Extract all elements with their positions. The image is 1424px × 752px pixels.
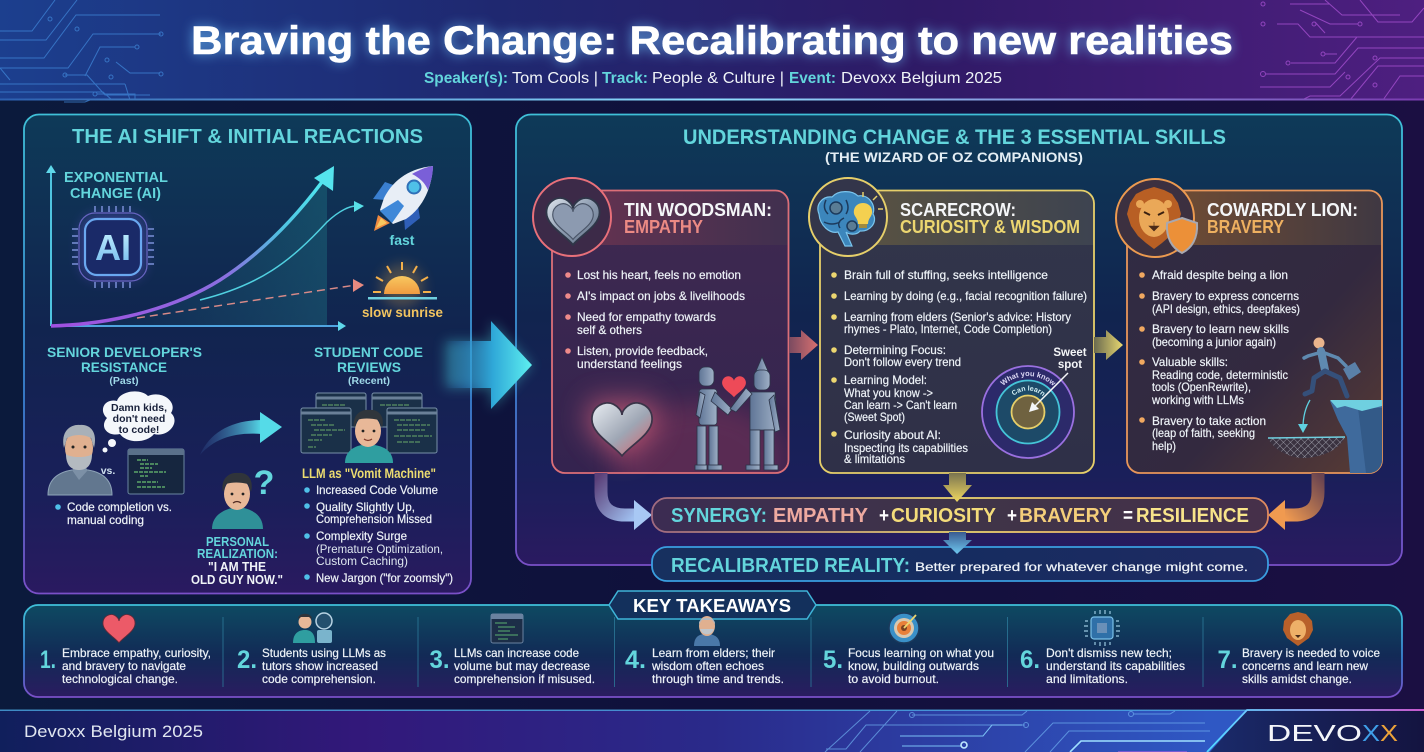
card title: SCARECROW:: [900, 200, 1016, 220]
takeaway 1: Embrace empathy, curiosity,: [62, 646, 211, 660]
bullet: code completion vs manual coding: [55, 500, 172, 527]
heading: senior developer's resistance: RESISTANCE: [81, 359, 167, 375]
student review bullets: Complexity Surge: [316, 529, 407, 543]
takeaway 3: LLMs can increase code: [454, 646, 579, 660]
logo: Devoxx: X: [1380, 720, 1398, 746]
card title: TIN WOODSMAN:: [624, 200, 772, 220]
panel heading: UNDERSTANDING CHANGE & THE 3 ESSENTIAL SKILLS: [683, 126, 1226, 149]
curiosity bullets: rhymes - Plato, Internet, Code Completion): [844, 322, 1052, 336]
label: sweet spot: spot: [1058, 359, 1082, 371]
bar: synergy equation: +: [1007, 505, 1017, 527]
label: slow sunrise: slow sunrise: [362, 304, 443, 320]
icon: robot and tin man handshake: [695, 357, 780, 470]
bar: synergy equation: [652, 498, 1268, 532]
takeaway 4: wisdom often echoes: [651, 659, 764, 673]
subtitle: speaker, track, event: Event:: [789, 70, 836, 87]
diagram: sweet spot target: Can learn: [1012, 386, 1044, 396]
logo: Devoxx: [1267, 720, 1398, 746]
icon: glowing metal heart: [588, 399, 656, 459]
badge: key takeaways: KEY TAKEAWAYS: [633, 596, 791, 616]
takeaway 4: [625, 616, 784, 686]
takeaway 2: Students using LLMs as: [262, 646, 386, 660]
takeaway 3: volume but may decrease: [454, 659, 590, 673]
empathy bullets: Listen, provide feedback,: [577, 344, 708, 358]
takeaway 7: Bravery is needed to voice: [1242, 646, 1380, 660]
empathy bullets: understand feelings: [577, 357, 682, 371]
takeaway 3: [430, 614, 595, 686]
logo: Devoxx: DEVO: [1267, 720, 1362, 746]
empathy bullets: AI's impact on jobs & livelihoods: [577, 289, 745, 303]
bar: synergy equation: RESILIENCE: [1136, 505, 1249, 527]
icon: rocket: [373, 166, 433, 248]
icon: senior developer: [48, 425, 112, 495]
takeaway 5: know, building outwards: [848, 659, 979, 673]
student review bullets: Quality Slightly Up,: [316, 500, 415, 514]
bravery bullets: tools (OpenRewrite),: [1152, 380, 1251, 394]
curiosity bullets: Learning from elders (Senior's advice: History: [844, 310, 1071, 324]
arrow: curiosity to synergy: [943, 473, 972, 502]
subtitle: speaker, track, event: Tom Cools |: [512, 70, 598, 87]
bar: synergy equation: EMPATHY: [773, 505, 869, 527]
student review bullets: New Jargon ("for zoomsly"): [316, 571, 453, 585]
bravery bullets: (becoming a junior again): [1152, 335, 1276, 349]
subtitle: speaker, track, event: Speaker(s):: [424, 70, 508, 87]
curiosity bullets: Curiosity about AI:: [844, 428, 941, 442]
takeaway 1: technological change.: [62, 672, 178, 686]
heading: student code reviews: STUDENT CODE: [314, 344, 423, 360]
card: cowardly lion bravery: [1116, 179, 1382, 473]
bar: synergy equation: CURIOSITY: [891, 505, 997, 527]
curiosity bullets: Determining Focus:: [844, 343, 946, 357]
heading: senior developer's resistance: SENIOR DEVELOPER'S: [47, 344, 202, 360]
card title: [624, 200, 772, 237]
takeaway 2: code comprehension.: [262, 672, 376, 686]
takeaway 1: [40, 614, 211, 686]
icon: lion and shield: [1116, 179, 1197, 257]
arrow: towards student reviews: [200, 412, 282, 455]
bullet: code completion vs manual coding: Code completion vs.: [67, 500, 172, 514]
takeaway 6: and limitations.: [1046, 672, 1128, 686]
curiosity bullets: Can learn -> Can't learn: [844, 398, 957, 412]
takeaway 5: to avoid burnout.: [848, 672, 939, 686]
bravery bullets: help): [1152, 439, 1176, 453]
bar: synergy equation: +: [879, 505, 889, 527]
icon: student with code windows: [301, 393, 437, 463]
panel: the AI shift and initial reactions: [24, 114, 471, 594]
takeaway 3: comprehension if misused.: [454, 672, 595, 686]
thought bubble: [102, 391, 175, 452]
chart label: CHANGE (AI): [70, 185, 161, 202]
bravery bullets: Afraid despite being a lion: [1152, 268, 1288, 282]
subtitle: speaker, track, event: Track:: [602, 70, 648, 87]
bravery bullets: [1139, 268, 1300, 453]
icon: leap of faith runner, cliff and net: [1268, 338, 1382, 473]
arrow: bravery to synergy: [1268, 473, 1318, 530]
arrow: into understanding change panel: [445, 321, 532, 409]
student review bullets: Increased Code Volume: [316, 483, 438, 497]
subtitle: speaker, track, event: People & Culture |: [652, 70, 784, 87]
diagram: sweet spot target: [981, 347, 1087, 459]
takeaway 7: concerns and learn new: [1242, 659, 1368, 673]
panel heading: THE AI SHIFT & INITIAL REACTIONS: [72, 126, 423, 148]
takeaway 6: 6.: [1020, 646, 1040, 674]
card title: CURIOSITY & WISDOM: [900, 217, 1080, 237]
diagram: sweet spot target: What you know: [1000, 372, 1056, 386]
chart label: [64, 169, 168, 202]
label: sweet spot: Sweet: [1053, 347, 1087, 359]
student review bullets: Custom Caching): [316, 554, 408, 568]
heading: student code reviews: REVIEWS: [337, 359, 401, 375]
takeaway 4: 4.: [625, 646, 646, 674]
student review bullets: [304, 483, 453, 585]
bravery bullets: working with LLMs: [1151, 393, 1244, 407]
label: vs.: vs.: [101, 465, 115, 477]
curiosity bullets: Brain full of stuffing, seeks intelligence: [844, 268, 1048, 282]
curiosity bullets: Learning by doing (e.g., facial recognition failure): [844, 289, 1087, 303]
bravery bullets: Bravery to take action: [1152, 414, 1266, 428]
card: scarecrow curiosity and wisdom: [808, 177, 1095, 474]
bravery bullets: (API design, ethics, deepfakes): [1152, 302, 1300, 316]
panel: understanding change and the 3 essential skills: [516, 114, 1402, 565]
label: sweet spot: [1053, 347, 1087, 371]
title: Braving the Change: Recalibrating to new realities: [191, 19, 1233, 63]
icon: metal heart badge: [533, 178, 611, 256]
takeaway 1: and bravery to navigate: [62, 659, 186, 673]
takeaway 5: 5.: [823, 646, 843, 674]
curiosity bullets: What you know ->: [844, 386, 933, 400]
text: personal realization: PERSONAL: [206, 534, 269, 549]
panel subheading: (THE WIZARD OF OZ COMPANIONS): [825, 149, 1083, 165]
takeaway 6: understand its capabilities: [1046, 659, 1185, 673]
card title: COWARDLY LION:: [1207, 200, 1358, 220]
card title: [900, 200, 1080, 237]
bar: recalibrated reality: Better prepared for whatever change might come.: [915, 560, 1248, 574]
header band: [0, 0, 1424, 102]
icon: slow sunrise: [362, 262, 443, 320]
bravery bullets: (leap of faith, seeking: [1152, 426, 1255, 440]
heading: senior developer's resistance: (Past): [109, 375, 139, 387]
footer band: [0, 710, 1424, 752]
arrow: empathy to synergy: [601, 473, 652, 530]
icon: brain with lightbulb: [809, 178, 887, 256]
curiosity bullets: Inspecting its capabilities: [844, 441, 968, 455]
icon: person with question mark: ?: [254, 464, 274, 502]
curiosity bullets: (Sweet Spot): [844, 410, 905, 424]
takeaway 1: 1.: [40, 646, 56, 674]
student review bullets: (Premature Optimization,: [316, 542, 443, 556]
panel: key takeaways: [24, 591, 1402, 697]
subtitle: speaker, track, event: [424, 70, 1002, 87]
bullet: code completion vs manual coding: manual coding: [67, 513, 144, 527]
takeaway 6: Don't dismiss new tech;: [1046, 646, 1172, 660]
label: LLM as vomit machine: LLM as "Vomit Machine": [302, 466, 436, 481]
thought bubble: don't need: [113, 413, 165, 425]
icon: AI chip: AI: [95, 227, 131, 268]
takeaway 2: tutors show increased: [262, 659, 378, 673]
takeaway 4: Learn from elders; their: [652, 646, 775, 660]
card title: BRAVERY: [1207, 217, 1284, 237]
exponential change chart: [46, 165, 364, 331]
subtitle: speaker, track, event: Devoxx Belgium 2025: [841, 70, 1002, 87]
icon: code window: [128, 449, 184, 494]
takeaway 5: [823, 613, 994, 686]
logo: Devoxx: X: [1362, 720, 1380, 746]
empathy bullets: Need for empathy towards: [577, 310, 716, 324]
bravery bullets: Valuable skills:: [1152, 355, 1228, 369]
arrow: synergy to recalibrated reality: [943, 532, 972, 554]
footer event label: Devoxx Belgium 2025: [24, 722, 203, 741]
takeaway 5: Focus learning on what you: [848, 646, 994, 660]
title: Braving the Change: Recalibrating to new realities: [191, 19, 1233, 63]
heading: senior developer's resistance: [47, 344, 202, 387]
heading: student code reviews: [314, 344, 423, 387]
card: tin woodsman empathy: [532, 177, 790, 474]
text: personal realization: [191, 534, 283, 587]
empathy bullets: [565, 268, 745, 371]
empathy bullets: Lost his heart, feels no emotion: [577, 268, 741, 282]
takeaway 7: skills amidst change.: [1242, 672, 1352, 686]
takeaway 2: 2.: [237, 646, 257, 674]
heading: student code reviews: (Recent): [348, 375, 390, 387]
arrow: empathy to curiosity: [789, 330, 818, 360]
card title: EMPATHY: [624, 217, 703, 237]
label: fast: fast: [390, 232, 415, 248]
takeaway 4: through time and trends.: [652, 672, 784, 686]
student review bullets: Comprehension Missed: [316, 512, 432, 526]
bar: recalibrated reality: RECALIBRATED REALITY:: [671, 555, 910, 577]
curiosity bullets: [831, 268, 1087, 466]
empathy bullets: self & others: [577, 323, 642, 337]
curiosity bullets: Don't follow every trend: [844, 355, 961, 369]
bar: synergy equation: =: [1123, 505, 1133, 527]
takeaway 7: 7.: [1218, 646, 1238, 674]
card title: [1207, 200, 1358, 237]
curiosity bullets: & limitations: [844, 452, 905, 466]
chart label: EXPONENTIAL: [64, 169, 168, 186]
bar: recalibrated reality: [652, 547, 1268, 581]
bravery bullets: Reading code, deterministic: [1152, 368, 1288, 382]
text: personal realization: "I AM THE: [208, 559, 266, 574]
icon: person with question mark: [212, 464, 274, 529]
text: personal realization: REALIZATION:: [197, 546, 278, 561]
arrow: curiosity to bravery: [1094, 330, 1123, 360]
icon: AI chip: [72, 206, 154, 288]
bar: synergy equation: SYNERGY:: [671, 505, 767, 527]
takeaway 3: 3.: [430, 646, 450, 674]
takeaway 6: [1020, 610, 1185, 686]
text: personal realization: OLD GUY NOW.": [191, 572, 283, 587]
takeaway 2: [237, 613, 386, 686]
bravery bullets: Bravery to express concerns: [1152, 289, 1299, 303]
bar: synergy equation: BRAVERY: [1019, 505, 1113, 527]
badge: key takeaways: [609, 591, 816, 619]
bravery bullets: Bravery to learn new skills: [1152, 322, 1289, 336]
thought bubble: to code!: [119, 424, 159, 436]
curiosity bullets: Learning Model:: [844, 373, 927, 387]
thought bubble: Damn kids,: [111, 402, 167, 414]
takeaway 7: [1218, 612, 1380, 686]
